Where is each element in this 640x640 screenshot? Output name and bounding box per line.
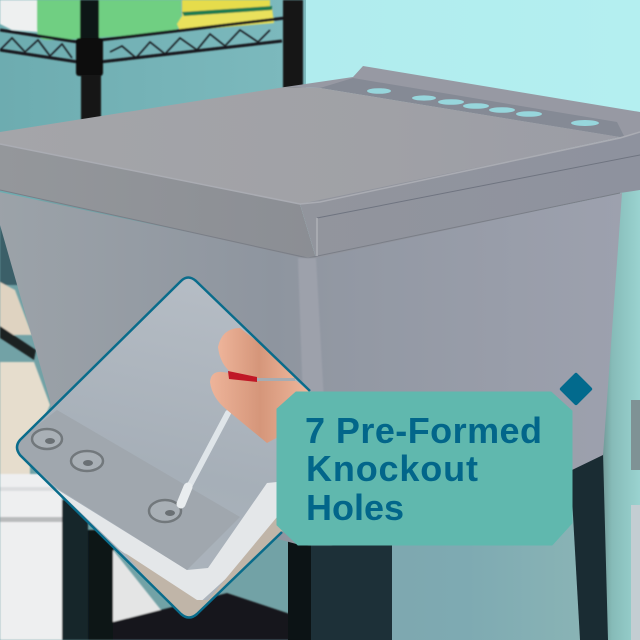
sink body xyxy=(0,190,622,545)
laundry sink xyxy=(0,66,640,545)
knockout holes xyxy=(367,88,599,126)
body corner highlight xyxy=(298,258,332,545)
small diamond accent xyxy=(559,372,593,406)
inset background xyxy=(32,278,310,600)
callout text xyxy=(305,410,542,528)
swab xyxy=(188,410,231,486)
object at right edge xyxy=(631,400,640,640)
green jug xyxy=(37,0,181,40)
rack post lower xyxy=(62,500,88,640)
tan surface xyxy=(125,518,282,616)
inset border xyxy=(17,278,310,618)
callout card xyxy=(277,392,572,545)
yellow sponges xyxy=(177,0,274,31)
basin top surface xyxy=(0,87,640,205)
lip underside xyxy=(55,482,285,605)
callout text: Holes xyxy=(306,487,404,528)
rack posts xyxy=(80,0,99,40)
floor shelf xyxy=(113,593,293,640)
hole band xyxy=(10,410,240,570)
basket xyxy=(113,550,165,622)
bucket xyxy=(0,474,62,640)
white bottle xyxy=(0,0,38,32)
upper finger xyxy=(218,328,300,382)
front rim right xyxy=(300,132,640,258)
callout text: 7 Pre-Formed xyxy=(305,410,542,451)
towels, lower shelf and bucket at left xyxy=(0,225,293,640)
inset photo of knockout holes xyxy=(10,270,320,630)
left sink leg xyxy=(288,530,392,640)
knockout discs xyxy=(32,429,181,522)
knockout strip xyxy=(320,78,625,138)
red handle xyxy=(228,371,257,382)
right sink leg xyxy=(570,452,608,640)
lower finger xyxy=(210,372,310,443)
back ledge with backsplash xyxy=(285,66,640,137)
callout text: Knockout xyxy=(306,448,478,489)
shelf wires xyxy=(0,18,285,62)
front rim left xyxy=(0,144,316,259)
corner seam xyxy=(316,218,318,256)
wire shelf with bottles and sponges xyxy=(0,0,303,120)
